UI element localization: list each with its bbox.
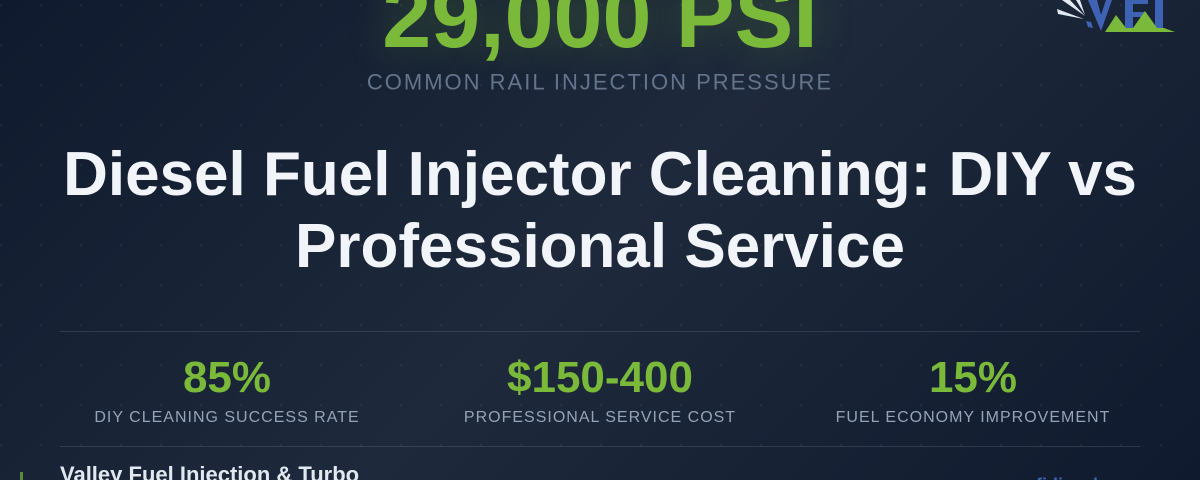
stat: professional service cost [464, 353, 736, 426]
green mountains [1105, 11, 1175, 32]
stat: DIY success rate [94, 353, 360, 426]
stats row [94, 353, 1110, 426]
stat: fuel economy improvement: 15% [929, 353, 1017, 402]
stat: professional service cost: PROFESSIONAL SERVICE COST [464, 409, 736, 426]
title [63, 140, 1137, 281]
hero stat caption: COMMON RAIL INJECTION PRESSURE [367, 70, 833, 94]
stat: DIY success rate: DIY CLEANING SUCCESS RATE [94, 409, 360, 426]
title: Professional Service [295, 212, 905, 281]
I letter [1155, 0, 1163, 28]
title: Diesel Fuel Injector Cleaning: DIY vs [63, 140, 1137, 209]
stat: fuel economy improvement [836, 353, 1110, 426]
F letter [1125, 0, 1148, 28]
footer accent bar [20, 472, 23, 480]
V letter [1088, 0, 1112, 31]
icon: VFI logo [1057, 0, 1175, 32]
stat: professional service cost: $150-400 [507, 353, 693, 402]
stat: DIY success rate: 85% [183, 353, 271, 402]
stat: fuel economy improvement: FUEL ECONOMY IMPROVEMENT [836, 409, 1110, 426]
spark lines [1057, 0, 1085, 19]
